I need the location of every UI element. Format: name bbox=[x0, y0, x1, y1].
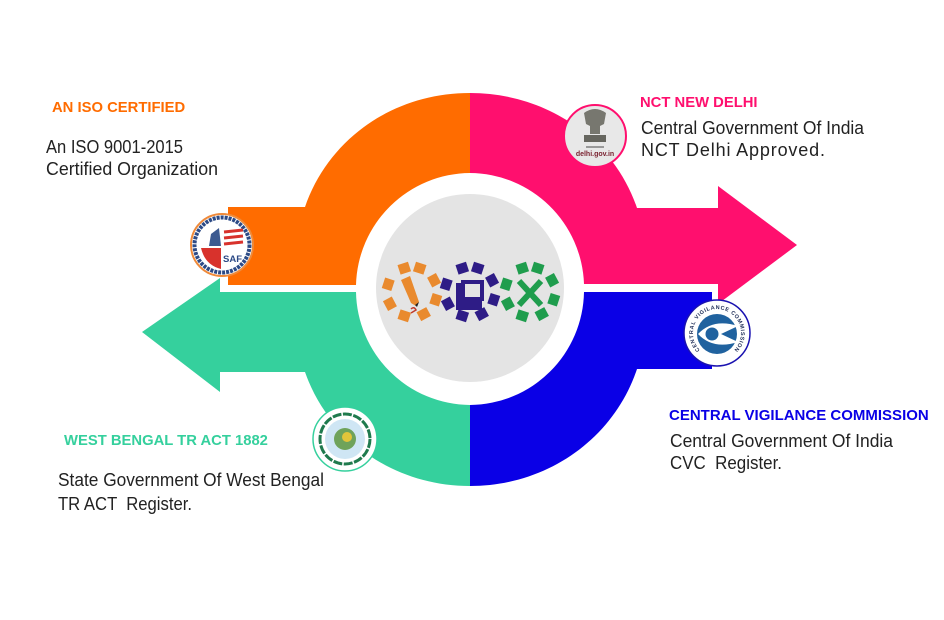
text: West Bengal description: State Government Of West Bengal bbox=[58, 470, 324, 490]
icon: CVC badge: CENTRAL VIGILANCE COMMISSION bbox=[689, 305, 745, 352]
panel: orange arrow segment bbox=[228, 93, 470, 285]
text: CVC description bbox=[670, 431, 894, 473]
text: NCT description: NCT Delhi Approved. bbox=[641, 140, 825, 160]
text: ISO description: Certified Organization bbox=[46, 159, 218, 179]
icon: green tools gear bbox=[500, 262, 560, 322]
heading: Central Vigilance Commission: CENTRAL VIGILANCE COMMISSION bbox=[669, 407, 929, 424]
icon: blue computer gear bbox=[440, 262, 500, 322]
panel: pink arrow segment bbox=[470, 93, 797, 304]
text: ISO description bbox=[46, 137, 218, 179]
text: NCT description bbox=[641, 118, 865, 160]
icon: West Bengal seal bbox=[313, 407, 377, 471]
icon: orange pencil gear bbox=[382, 262, 442, 322]
center grey circle bbox=[376, 194, 564, 382]
text: ISO description: An ISO 9001-2015 bbox=[46, 137, 183, 157]
text: West Bengal description: TR ACT Register. bbox=[58, 494, 192, 514]
text: NCT description: Central Government Of India bbox=[641, 118, 865, 138]
icon: CVC badge bbox=[683, 299, 751, 367]
panel: green arrow segment bbox=[142, 278, 470, 486]
icon: Delhi government badge: delhi.gov.in bbox=[576, 151, 614, 158]
icon: SAF badge bbox=[191, 214, 253, 276]
panel: blue arrow segment bbox=[470, 292, 712, 486]
text: CVC description: Central Government Of India bbox=[670, 431, 894, 451]
text: West Bengal description bbox=[58, 470, 324, 514]
icon: SAF badge: SAF bbox=[223, 254, 242, 265]
text: CVC description: CVC Register. bbox=[670, 453, 782, 473]
heading: an ISO certified: AN ISO CERTIFIED bbox=[52, 100, 185, 116]
heading: NCT New Delhi: NCT NEW DELHI bbox=[640, 95, 758, 111]
icon: Delhi government badge bbox=[564, 105, 626, 167]
heading: West Bengal TR Act: WEST BENGAL TR ACT 1882 bbox=[64, 433, 268, 449]
